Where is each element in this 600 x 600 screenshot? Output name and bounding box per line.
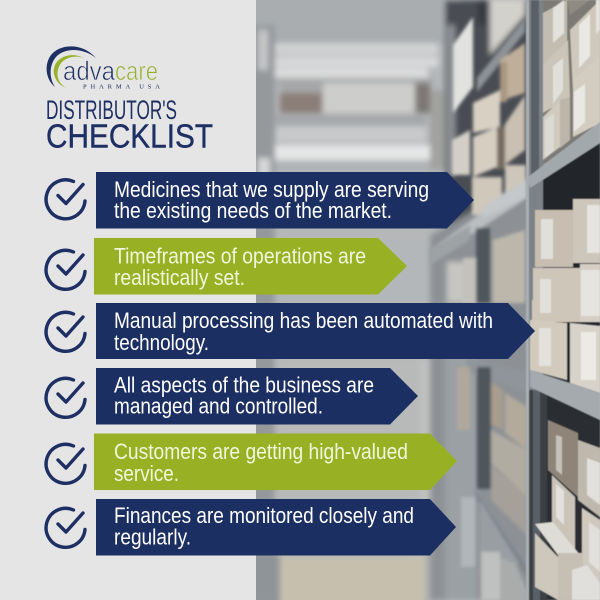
panel: left background [0, 0, 256, 600]
banner 2: Timeframes of operations are [114, 244, 366, 268]
banner 4 [96, 368, 418, 424]
banner 1: Medicines that we supply are serving [114, 177, 429, 202]
icon: check 4 [46, 378, 85, 417]
logo wordmark adva: adva [63, 56, 116, 86]
lower boxes [548, 420, 578, 497]
banner 4: All aspects of the business are [114, 372, 374, 398]
icon: check 2 [46, 250, 85, 289]
upper boxes [543, 0, 567, 65]
logo wordmark care: care [115, 56, 158, 86]
top metal shelf [545, 145, 598, 179]
banner 5 [94, 434, 457, 490]
banner 3: technology. [114, 330, 209, 355]
aisle-left racks [445, 0, 530, 250]
banner 6 [96, 499, 456, 556]
banner 2 [94, 238, 407, 294]
middle metal shelf [530, 370, 600, 420]
logo swoosh: green arc [54, 55, 84, 88]
redraw of the top shelf over the post [528, 122, 600, 188]
logo tagline: PHARMA USA [83, 84, 160, 90]
logo [47, 46, 160, 90]
banner 2: realistically set. [114, 265, 245, 290]
banner 1: the existing needs of the market. [114, 198, 392, 223]
icon: check 6 [46, 508, 85, 547]
heading: checklist: CHECKLIST [46, 118, 213, 156]
icon: check 3 [46, 312, 85, 351]
banner 3 [96, 303, 535, 359]
upright post [528, 0, 544, 391]
banner 5: Customers are getting high-valued [114, 439, 408, 464]
heading: distributor's: DISTRIBUTOR'S [46, 95, 177, 125]
shelf dark interiors [543, 0, 600, 165]
banner 1 [96, 172, 474, 228]
banner 6: regularly. [114, 524, 191, 550]
lower rack [468, 360, 474, 372]
banner 4: managed and controlled. [114, 394, 323, 418]
icon: check 5 [46, 444, 85, 483]
icon: check 1 [46, 180, 85, 219]
logo swoosh: navy arc [47, 46, 96, 87]
middle boxes [535, 210, 573, 267]
banner 6: Finances are monitored closely and [114, 503, 414, 528]
banner 5: service. [114, 461, 179, 486]
panel: warehouse photo [250, 0, 600, 600]
banner 3: Manual processing has been automated with [114, 308, 493, 333]
